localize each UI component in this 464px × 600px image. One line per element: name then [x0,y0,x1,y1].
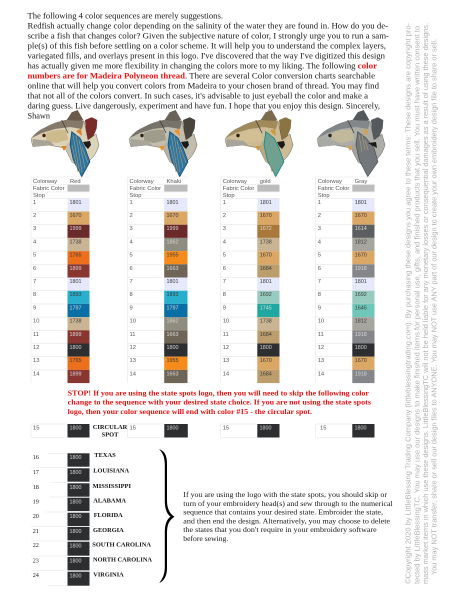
table: gold colorway: 12 [223,345,229,351]
table: gray colorway: 14 [318,371,325,377]
state spot color list: 1800 [70,559,82,565]
color 15 row: gray [316,424,374,438]
table: khaki colorway: 6 [130,266,133,272]
table: gray colorway: 7 [318,279,321,285]
color 15 row: red [31,424,90,438]
table: red colorway: Red [70,179,81,185]
table: gold colorway: 7 [223,279,226,285]
state spot color list: 1800 [70,544,82,550]
state spot color list: 17 [33,469,39,476]
state name labels [92,452,152,578]
table: red colorway: 1899 [70,266,82,272]
color 15 row: gold: 15 [223,426,229,432]
table: gold colorway: Stop [223,193,235,199]
table: khaki colorway: Stop [130,193,141,199]
table: gray colorway: 8 [318,292,321,298]
table: khaki colorway: 3 [130,226,133,232]
table: gold colorway [221,177,280,383]
state spot color list: 1800 [70,574,82,580]
state name labels: VIRGINIA [93,572,124,578]
stop warning text [68,389,371,416]
table: gold colorway: Colorway [223,179,247,185]
state spot color list: 20 [33,513,39,520]
icon: gold redfish [226,110,293,177]
table: khaki colorway: 1801 [166,279,178,285]
table: red colorway: Stop [33,193,45,199]
table: khaki colorway: Colorway [130,179,154,185]
state spot color list: 1800 [70,455,82,461]
table: gold colorway: 6 [223,266,226,272]
table: red colorway: 1738 [70,239,82,245]
table: gold colorway: 1672 [260,226,272,232]
intro text block: scribe a fish that changes color? Given the subjective nature of color, I strongly urge you to run a sam- [28,32,389,40]
table: gray colorway: 2 [318,213,321,219]
table: gray colorway: 1670 [355,253,367,259]
state name labels: ALABAMA [93,498,126,504]
intro text block: variegated fills, and overlays present in this logo. I've discovered that the way I've digitized this design [28,52,385,60]
table: gold colorway: 14 [223,371,230,377]
state name labels: SOUTH CAROLINA [92,542,151,548]
stop warning text: STOP! If you are using the state spots logo, then you will need to skip the following color [68,389,370,398]
table: khaki colorway: 9 [130,305,133,311]
state name labels: GEORGIA [93,527,124,534]
state spot color list: 16 [33,454,39,461]
table: gold colorway: 1670 [260,253,272,259]
table: gray colorway: Stop [318,193,330,199]
table: red colorway: 11 [33,332,39,338]
intro text block: daring guess. Live dangerously, experiment and have fun. I hope that you enjoy this design. Sincerely, [28,102,380,110]
table: gray colorway: Fabric Color [318,186,349,192]
table: gray colorway: 13 [318,358,324,364]
intro text block: color [358,62,378,70]
table: gold colorway: 2 [223,213,226,219]
state spots instructions text: before sewing. [183,534,228,543]
table: gray colorway: 1918 [355,332,367,338]
icon: khaki redfish [130,110,197,177]
table: gray colorway: Colorway [318,179,342,185]
state spot color list [31,453,90,586]
table: gold colorway: 1745 [260,305,272,311]
state spot color list: 18 [33,484,39,491]
table: red colorway: 1801 [70,279,82,285]
stop warning text: change to the sequence with your desired state choice. If you are not using the state spots [68,398,371,407]
table: gold colorway: 1684 [260,266,272,272]
state spot color list: 19 [33,499,39,506]
table: red colorway: 1738 [70,319,82,325]
table: gold colorway: 1801 [260,200,272,206]
table: red colorway: 10 [33,319,39,325]
table: red colorway: 1670 [70,213,82,219]
state spot color list: 1800 [70,485,82,491]
vertical copyright text [404,22,438,584]
intro text block: online that will help you convert colors from Madeira to your chosen brand of thread. You may find [28,82,379,90]
vertical copyright text: tected by LittleBlessingTC. You may use our designs to make finished items for personal use, gifts, and finished products that you sell. You must have written consent to [412,26,422,584]
state name labels: MISSISSIPPI [93,483,132,490]
table: gold colorway: 1670 [260,358,272,364]
table: gold colorway: 3 [223,226,226,232]
table: khaki colorway: 11 [130,332,136,338]
color 15 row: khaki: 15 [130,426,136,432]
state spots instructions text [183,490,393,543]
state name labels: LOUISIANA [93,468,129,474]
table: gray colorway: 6 [318,266,321,272]
table: gray colorway: 1801 [355,279,367,285]
table: red colorway: 1899 [70,371,82,377]
table: khaki colorway: 2 [130,213,133,219]
state spots instructions text: turn of your embroidery head(s) and sew through to the numerical [183,499,393,508]
state name labels: FLORIDA [94,512,123,519]
table: gold colorway: 5 [223,253,226,259]
table: khaki colorway: 4 [130,239,134,245]
table: khaki colorway: 1955 [166,358,178,364]
table: red colorway [31,177,90,383]
table: gold colorway: 1738 [260,319,272,325]
table: gold colorway: 1801 [260,279,272,285]
table: red colorway: 3 [33,226,36,232]
right curly brace [159,449,174,583]
table: red colorway: 12 [33,345,39,351]
table: khaki colorway: 1999 [166,226,178,232]
table: khaki colorway: 1797 [166,305,178,311]
table: gold colorway: 9 [223,305,226,311]
color 15 row: gold [221,424,280,438]
table: khaki colorway [128,177,188,383]
state spot color list: 1800 [70,514,82,520]
intro text block: Shawn [28,112,50,120]
table: khaki colorway: 1 [130,200,133,206]
table: gray colorway: 1800 [355,345,367,351]
table: gray colorway: 10 [318,319,324,325]
color 15 row: gray: 15 [320,426,326,432]
table: gold colorway: 1 [223,200,226,206]
intro text block: ple(s) of this fish before settling on a color scheme. It will help you to understand the complex layers, [28,42,386,50]
table: red colorway: 9 [33,305,36,311]
table: gold colorway: 1670 [260,213,272,219]
stop warning text: logo, then your color sequence will end with color #15 - the circular spot. [68,407,312,416]
table: gray colorway: 1645 [355,305,367,311]
table: khaki colorway: Fabric Color [130,186,161,192]
table: gold colorway: 11 [223,332,229,338]
vertical copyright text: You may NOT transfer, share or sell our design files to ANYONE. You may NOT use ANY part of our design to create your own embroidery design file to share or sell. [430,39,438,575]
intro text block: that not all of the colors convert. In such cases, it's advisable to just eyeball the color and make a [28,92,368,100]
state spot color list: 1800 [70,529,82,535]
table: red colorway: 1 [33,200,36,206]
table: gray colorway: 12 [318,345,324,351]
table: gray colorway: 1692 [355,292,367,298]
table: gold colorway: 4 [223,239,227,245]
table: khaki colorway: 13 [130,358,136,364]
table: khaki colorway: 1663 [166,371,178,377]
table: red colorway: 1899 [70,332,82,338]
table: khaki colorway: 10 [130,319,136,325]
color 15 row: red: 1800 [70,426,82,432]
table: gold colorway: 1684 [260,332,272,338]
table: gray colorway: 4 [318,239,322,245]
table: gold colorway: 1738 [260,239,272,245]
table: gray colorway: 9 [318,305,321,311]
state spot color list: 21 [33,528,39,535]
table: khaki colorway: 1893 [166,292,178,298]
table: red colorway: Colorway [33,179,57,185]
vertical copyright text: ©Copyright 2020 by LittleBlessing Trading Company (littleblessingtrading.com). By purchasing these designs you agree to these terms: These designs are copyright pro- [404,22,412,584]
table: red colorway: 1893 [70,292,82,298]
table: khaki colorway: Khaki [166,179,181,185]
circular spot label [93,424,128,438]
color 15 row: gray: 1800 [354,426,366,432]
table: gray colorway [316,177,375,383]
table: gray colorway: 1670 [355,213,367,219]
table: gray colorway: 11 [318,332,324,338]
table: red colorway: 1765 [70,253,82,259]
table: khaki colorway: 1862 [166,319,178,325]
state spots instructions text: If you are using the logo with the state spots, you should skip or [183,490,388,499]
state spot color list: 23 [33,558,39,565]
table: gray colorway: 1614 [355,226,367,232]
table: gray colorway: 1670 [355,358,367,364]
table: gray colorway: 3 [318,226,321,232]
state spot color list: 22 [33,542,39,549]
table: gray colorway: 1 [318,200,321,206]
vertical copyright text: mass market items in which use these designs. LittleBlessingTC will not be held liable for any monetary losses or consequential damages as a result of using these designs. [421,23,430,584]
table: red colorway: 7 [33,279,36,285]
color 15 row: red: 15 [33,426,39,432]
table: khaki colorway: 1663 [166,266,178,272]
table: khaki colorway: 1801 [166,200,178,206]
table: khaki colorway: 5 [130,253,133,259]
state name labels: TEXAS [94,452,116,459]
table: red colorway: 2 [33,213,36,219]
table: khaki colorway: 1670 [166,213,178,219]
table: gold colorway: 1800 [260,345,272,351]
state name labels: NORTH CAROLINA [93,556,152,564]
table: red colorway: 6 [33,266,36,272]
table: gray colorway: 1918 [355,371,367,377]
color 15 row: khaki: 1800 [166,426,178,432]
table: khaki colorway: 8 [130,292,133,298]
table: red colorway: 4 [33,239,37,245]
table: gray colorway: Gray [355,179,367,185]
color 15 row: khaki [128,424,188,438]
circular spot label: SPOT [102,432,119,438]
table: gold colorway: 13 [223,358,229,364]
icon: red redfish [32,110,99,177]
table: red colorway: 5 [33,253,36,259]
intro text block: Redfish actually change color depending on the salinity of the water they are found in. How do you de- [28,22,388,30]
table: khaki colorway: 1862 [166,239,178,245]
icon: gray redfish [318,110,385,177]
table: khaki colorway: 12 [130,345,136,351]
table: gold colorway: 1692 [260,292,272,298]
table: gold colorway: gold [260,179,271,185]
intro text block: has actually given me more flexibility in changing the colors more to my liking. The following [28,62,356,70]
intro text block: . There are several Color conversion charts searchable [185,72,375,80]
state spot color list: 1800 [70,470,82,476]
table: red colorway: 1999 [70,226,82,232]
table: gray colorway: 1812 [355,319,367,325]
intro text block [28,12,389,120]
intro text block: numbers are for Madeira Polyneon thread [28,72,185,80]
table: gray colorway: 1812 [355,239,367,245]
table: red colorway: 1801 [70,200,82,206]
table: khaki colorway: 1800 [166,345,178,351]
table: gold colorway: 1684 [260,371,272,377]
table: gray colorway: 1918 [355,266,367,272]
table: gray colorway: 1801 [355,200,367,206]
color 15 row: gold: 1800 [260,426,272,432]
table: red colorway: 1765 [70,358,82,364]
table: red colorway: 8 [33,292,36,298]
table: khaki colorway: 14 [130,371,137,377]
intro text block: The following 4 color sequences are merely suggestions. [28,12,223,20]
table: red colorway: Fabric Color [33,186,65,192]
table: gray colorway: 5 [318,253,321,259]
state spot color list: 24 [33,572,39,579]
state spots instructions text: the states that you don't require in your embroidery software [183,525,377,534]
table: red colorway: 14 [33,371,40,377]
circular spot label: CIRCULAR [93,424,128,431]
table: khaki colorway: 7 [130,279,133,285]
table: gold colorway: 8 [223,292,226,298]
state spots instructions text: and then end the design. Alternatively, you may choose to delete [183,516,391,525]
table: red colorway: 1800 [70,345,82,351]
state spot color list: 1800 [70,500,82,506]
table: khaki colorway: 1663 [166,332,178,338]
table: red colorway: 1797 [70,305,82,311]
table: gold colorway: 10 [223,319,229,325]
table: red colorway: 13 [33,358,39,364]
state spots instructions text: sequence that contains your desired state. Embroider the state, [183,508,383,517]
table: khaki colorway: 1955 [166,253,178,259]
table: gold colorway: Fabric Color [223,186,254,192]
